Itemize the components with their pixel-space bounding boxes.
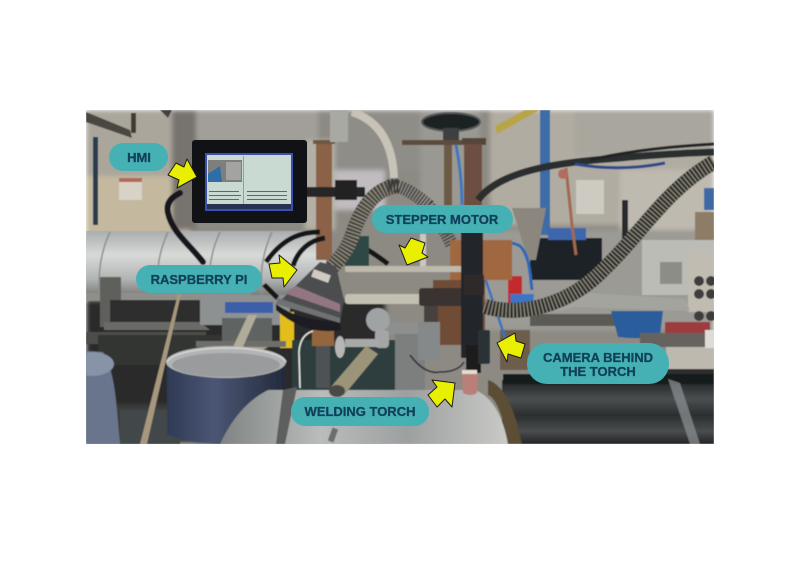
dark center equipment	[292, 340, 396, 390]
arm clamp block	[330, 110, 348, 142]
ceiling truss	[86, 112, 132, 138]
vertical post upper	[464, 142, 482, 206]
hoses cable bundle	[266, 232, 320, 262]
wall notice	[119, 178, 142, 200]
control box	[366, 308, 390, 332]
hanging copper chain	[566, 168, 576, 255]
label: Raspberry Pi: RASPBERRY PI	[151, 272, 247, 287]
camera	[478, 330, 490, 364]
horizontal steel rods	[345, 266, 463, 272]
large steel pipe	[86, 231, 326, 299]
hmi cable	[168, 193, 203, 262]
label: Stepper motor: STEPPER MOTOR	[386, 212, 499, 227]
torch body	[460, 233, 484, 358]
label: Welding torch: WELDING TORCH	[305, 404, 415, 419]
steel drum	[167, 362, 285, 444]
copper support column	[316, 142, 332, 260]
hose behind drum	[248, 346, 268, 350]
label: HMI: HMI	[127, 150, 151, 165]
label: Camera behind the torch	[527, 343, 669, 384]
hand wheel	[422, 113, 480, 131]
angled steel tube	[330, 346, 378, 395]
label: Camera behind the torch: CAMERA BEHIND	[543, 350, 653, 365]
label: Camera behind the torch: THE TORCH	[560, 364, 636, 379]
label: Raspberry Pi	[136, 265, 262, 293]
copper sheet panel	[450, 240, 512, 280]
torch tip	[462, 370, 477, 376]
arrow: Welding torch	[428, 380, 455, 407]
back wall	[86, 110, 714, 444]
torch clamp assembly	[419, 288, 465, 306]
monitor screen	[205, 153, 293, 211]
stepper motor mount	[420, 234, 426, 266]
label: Welding torch	[291, 397, 429, 426]
wooden stick	[140, 294, 181, 444]
perforated steel tray	[556, 294, 690, 311]
white insulated hose	[352, 112, 394, 178]
blue tank and tools	[611, 311, 663, 338]
roller end flange	[488, 380, 522, 444]
right corrugated hose	[484, 162, 714, 310]
back machine bench	[86, 293, 251, 301]
arrow: HMI	[168, 159, 197, 188]
arrow: Raspberry Pi	[269, 255, 297, 287]
right workshop background	[540, 110, 550, 235]
black cable loop	[410, 355, 464, 372]
arrow: Stepper motor	[399, 238, 428, 265]
main grey corrugated hose	[330, 186, 400, 270]
left blue drum	[86, 351, 120, 444]
black curved cable top right	[478, 152, 714, 200]
label: HMI	[109, 143, 168, 171]
blue air hoses	[456, 145, 462, 205]
workpiece cylinder	[220, 390, 508, 444]
reflector hood	[262, 262, 344, 331]
arrow: Camera	[497, 333, 525, 362]
photo: welding station	[70, 110, 716, 444]
black rollers	[502, 380, 714, 444]
floor swarf	[120, 410, 180, 444]
white cable	[299, 331, 313, 388]
label: Stepper motor	[372, 205, 513, 233]
panel: hmi monitor	[192, 140, 307, 223]
